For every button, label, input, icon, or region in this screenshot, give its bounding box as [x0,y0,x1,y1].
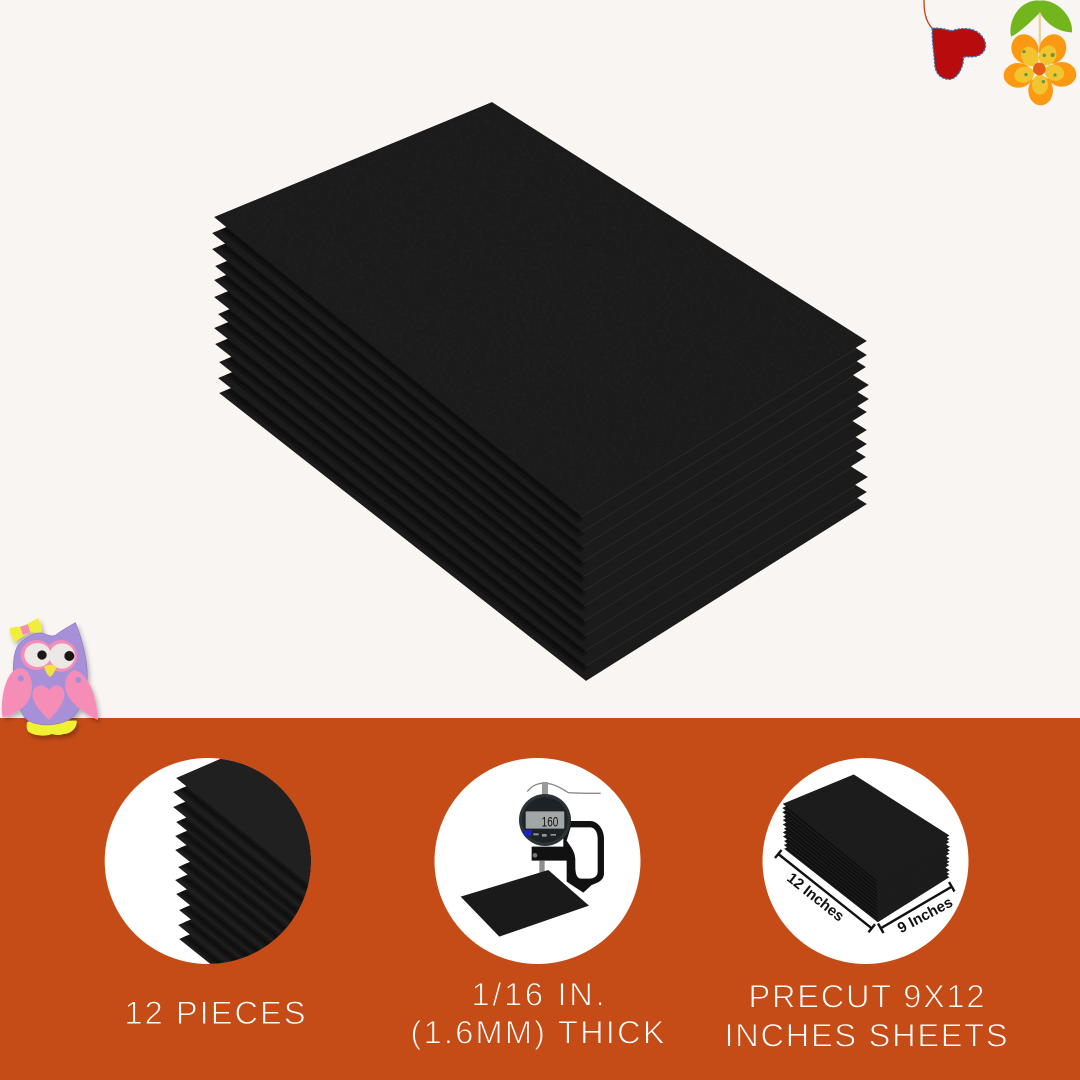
owl wings and heart [2,668,98,720]
panel: 12 pieces circle [104,758,311,964]
dimension line: 9 inches [878,882,954,933]
panel: thickness gauge circle [434,758,640,964]
gauge reading: 160 [542,814,558,830]
icon: red felt heart on string [924,0,986,79]
small stack image [782,774,950,922]
owl beak [44,665,57,677]
caption: thickness [410,976,665,1050]
label: 12 inches: 12 Inches [783,870,847,925]
icon: felt flower with green leaves [1004,0,1076,105]
caption: sheet size [724,978,1008,1054]
owl body [13,623,87,725]
owl bow [9,618,42,642]
dimension line: 12 inches [775,850,875,932]
zoomed stack edge [173,758,311,964]
caption: sheet size: INCHES SHEETS [724,1018,1008,1054]
icon: felt owl [2,618,98,736]
icon: digital thickness gauge on felt [461,782,604,937]
caption: 12 pieces: 12 PIECES [124,995,306,1031]
caption: thickness: (1.6MM) THICK [410,1014,665,1050]
main product image: stack of black felt sheets [210,100,870,681]
orange bottom band [0,718,1080,1080]
white circle [434,758,640,964]
panel: sheet dimensions circle [762,758,968,964]
caption: thickness: 1/16 IN. [472,976,604,1012]
white circle [762,758,968,964]
owl eyes [21,640,77,672]
caption: sheet size: PRECUT 9X12 [748,978,984,1014]
owl feet [27,721,77,736]
white circle [105,758,311,964]
label: 9 inches: 9 Inches [895,894,956,937]
